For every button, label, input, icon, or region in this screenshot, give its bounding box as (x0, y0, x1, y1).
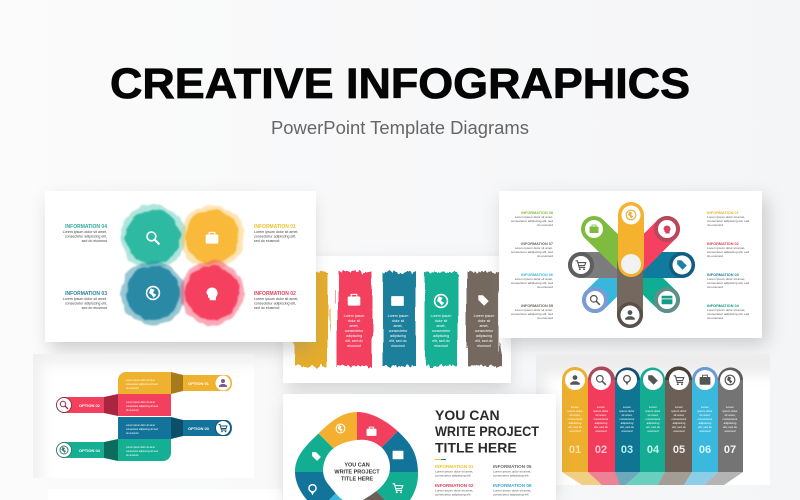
text: flower left labels: INFORMATION 08 (521, 211, 553, 215)
text: column captions: adipiscing (673, 421, 686, 425)
blob: red (180, 261, 244, 325)
text: information 05: Lorem ipsum dolor sit amet, (493, 470, 531, 474)
ring centre: YOU CAN (344, 462, 370, 468)
text: flower right labels: do eiusmod (707, 254, 723, 258)
column 06 (692, 367, 718, 472)
text: flower right labels: Lorem ipsum dolor sit amet, (707, 215, 745, 219)
petal: yellow (621, 206, 641, 274)
text: information 05: consectetur adipiscing elit (493, 474, 529, 478)
text: flower right labels: INFORMATION 04 (707, 304, 740, 308)
text: column captions: sit amet, (648, 413, 659, 417)
text: brush captions: adipiscing (346, 334, 362, 338)
option 04: consectetur adipiscing elit sed (126, 450, 159, 453)
text: information 01 (435, 464, 474, 478)
column 02 (588, 366, 615, 472)
petal: green (585, 220, 631, 265)
text: brush captions: eiusmod (391, 344, 405, 348)
text: column captions (568, 405, 738, 433)
text: brush captions: adipiscing (390, 334, 406, 338)
option 01: do eiusmod (126, 387, 139, 390)
text: information 01: INFORMATION 01 (254, 224, 296, 230)
column 01 (562, 367, 588, 472)
text: flower right labels (707, 211, 749, 320)
text: flower left labels: Lorem ipsum dolor sit amet, (515, 215, 553, 219)
text: flower left labels: do eiusmod (537, 316, 553, 320)
brush stroke: yellow (294, 272, 328, 366)
panel: bottom-left slide (48, 489, 282, 500)
icon: briefcase (348, 294, 360, 306)
blob: teal (121, 205, 185, 269)
blob: blue (121, 261, 185, 325)
text: brush captions: Lorem ipsum (344, 314, 364, 318)
petal: sky (582, 265, 631, 313)
icon: globe (147, 287, 159, 299)
text: information 04 (63, 224, 107, 243)
text: information 02: Lorem ipsum dolor sit amet, (254, 297, 298, 301)
option 04: OPTION 04 (79, 448, 101, 453)
text: flower right labels: INFORMATION 01 (707, 211, 739, 215)
option 04 (56, 439, 171, 461)
text: flower right labels: INFORMATION 03 (707, 273, 739, 277)
column 07 (718, 368, 743, 472)
text: flower left labels: Lorem ipsum dolor sit amet, (515, 246, 553, 250)
column 07: 07 (724, 444, 736, 456)
column 03: 03 (621, 444, 633, 456)
text: brush captions: amet, (436, 324, 446, 328)
text: flower right labels: consectetur adipiscing elit, sed (707, 312, 749, 316)
text: flower right labels: consectetur adipiscing elit, sed (707, 250, 749, 254)
option 03: do eiusmod (126, 432, 139, 435)
text: brush captions: adipiscing (476, 334, 492, 338)
text: column captions: Lorem (675, 405, 684, 409)
text: information 05: INFORMATION 05 (493, 464, 532, 469)
text: column captions: eiusmod (596, 429, 607, 433)
ring centre: WRITE PROJECT (334, 470, 380, 476)
heading: project title (435, 407, 539, 456)
text: column captions: adipiscing (569, 421, 582, 425)
text: flower right labels: Lorem ipsum dolor sit amet, (707, 308, 745, 312)
subtitle: PowerPoint Template Diagrams (271, 118, 529, 138)
text: brush captions: elit, sed do (345, 339, 363, 343)
text: column captions: sit amet, (622, 413, 633, 417)
text: column captions: elit, sed do (620, 425, 634, 429)
text: brush captions: consectetur (475, 329, 494, 333)
text: information 04: consectetur adipiscing elit, (65, 234, 107, 238)
icon: card (393, 451, 403, 459)
text: brush captions: dolor sit (478, 319, 490, 323)
text: information 01: sed do eiusmod (254, 239, 279, 243)
text: column captions: adipiscing (724, 421, 737, 425)
text: information 01: INFORMATION 01 (435, 464, 474, 469)
text: information 02: consectetur adipiscing elit, (254, 302, 296, 306)
column 01: 01 (569, 444, 581, 456)
column 06: 06 (699, 444, 711, 456)
panel: project title slide (283, 394, 556, 500)
text: information 06: Lorem ipsum dolor sit amet, (493, 488, 531, 492)
text: flower right labels: do eiusmod (707, 285, 723, 289)
text: information 03: sed do eiusmod (82, 306, 107, 310)
text: column captions: eiusmod (622, 429, 633, 433)
text: column captions: Lorem (623, 405, 632, 409)
text: flower right labels: do eiusmod (707, 223, 723, 227)
brush stroke: blue (383, 272, 415, 366)
text: flower left labels: INFORMATION 07 (521, 242, 553, 246)
text: brush captions: Lorem ipsum (388, 314, 408, 318)
text: column captions: sit amet, (700, 413, 711, 417)
text: flower left labels: do eiusmod (537, 254, 553, 258)
text: flower right labels: INFORMATION 02 (707, 242, 739, 246)
text: brush captions: dolor sit (392, 319, 404, 323)
text: flower right labels: consectetur adipiscing elit, sed (707, 281, 749, 285)
column 04: 04 (647, 444, 660, 456)
ring centre: TITLE HERE (341, 476, 373, 482)
text: information 03: Lorem ipsum dolor sit amet, (63, 297, 107, 301)
text: information 03: INFORMATION 03 (65, 291, 107, 297)
text: information 02: INFORMATION 02 (254, 291, 296, 297)
option 03: OPTION 03 (188, 426, 210, 431)
icon: briefcase (206, 232, 218, 244)
text: flower left labels: Lorem ipsum dolor sit amet, (515, 308, 553, 312)
text: column captions: Lorem (597, 405, 606, 409)
text: flower right labels: consectetur adipiscing elit, sed (707, 219, 749, 223)
text: information 01 (254, 224, 298, 243)
text: column captions: Lorem (701, 405, 710, 409)
text: brush captions: consectetur (389, 329, 408, 333)
column reflections (562, 472, 743, 485)
text: column captions: consectetur (620, 417, 635, 421)
icon: globe (336, 424, 345, 433)
text: flower left labels: consectetur adipiscing elit, sed (511, 312, 553, 316)
text: brush captions: dolor sit (435, 319, 447, 323)
text: information 02 (435, 483, 474, 496)
column 04 (640, 368, 665, 472)
text: information 04: sed do eiusmod (82, 239, 107, 243)
icon: card (391, 296, 404, 306)
text: brush captions: Lorem ipsum (431, 314, 451, 318)
text: brush captions: dolor sit (348, 319, 360, 323)
text: column captions: Lorem (571, 405, 580, 409)
option 04: Lorem ipsum dolor sit amet (126, 446, 155, 449)
option 02: OPTION 02 (79, 403, 101, 408)
text: brush captions: elit, sed do (475, 339, 493, 343)
text: column captions: elit, sed do (672, 425, 686, 429)
brush stroke: teal (425, 272, 458, 366)
text: column captions: consectetur (646, 417, 661, 421)
text: brush captions: adipiscing (433, 334, 449, 338)
petal: blue (631, 252, 695, 278)
text: brush captions: elit, sed do (432, 339, 450, 343)
text: column captions: elit, sed do (698, 425, 712, 429)
text: brush captions: amet, (350, 324, 358, 328)
text: column captions: consectetur (672, 417, 687, 421)
text: brush captions: eiusmod (434, 344, 448, 348)
text: flower left labels: consectetur adipiscing elit, sed (511, 250, 553, 254)
column 05 (665, 366, 692, 472)
text: column captions: eiusmod (570, 429, 581, 433)
petal: teal (631, 265, 680, 313)
text: column captions: Lorem (726, 405, 735, 409)
text: information 01: Lorem ipsum dolor sit amet, (435, 470, 473, 474)
text: column captions: Lorem (649, 405, 658, 409)
icon: tag (478, 295, 489, 306)
text: flower left labels (511, 211, 553, 320)
text: column captions: eiusmod (648, 429, 659, 433)
text: column captions: sit amet, (725, 413, 736, 417)
text: information 05 (493, 464, 532, 478)
icon: pin (309, 485, 316, 495)
option 01 (118, 372, 232, 394)
option 01: Lorem ipsum dolor sit amet (126, 379, 155, 382)
text: column captions: ipsum dolor (620, 409, 635, 413)
brush stroke: brown (467, 272, 500, 366)
text: column captions: eiusmod (674, 429, 685, 433)
ring chart (295, 412, 418, 500)
option 03 (118, 417, 232, 439)
text: information 06: consectetur adipiscing elit (493, 492, 529, 496)
text: column captions: sit amet, (596, 413, 607, 417)
text: column captions: ipsum dolor (594, 409, 609, 413)
icon: head (206, 287, 218, 300)
text: flower left labels: INFORMATION 06 (521, 273, 553, 277)
text: column captions: adipiscing (699, 421, 712, 425)
text: column captions: consectetur (568, 417, 583, 421)
text: column captions: elit, sed do (594, 425, 608, 429)
text: flower left labels: consectetur adipiscing elit, sed (511, 281, 553, 285)
text: column captions: elit, sed do (723, 425, 737, 429)
option 02: Lorem ipsum dolor sit amet (126, 401, 155, 404)
brush stroke: red (337, 272, 372, 366)
text: column captions: ipsum dolor (672, 409, 687, 413)
text: information 06 (493, 483, 532, 496)
text: column captions: sit amet, (674, 413, 685, 417)
text: flower left labels: do eiusmod (537, 285, 553, 289)
text: flower right labels: do eiusmod (707, 316, 723, 320)
title: CREATIVE INFOGRAPHICS (110, 60, 690, 108)
text: column captions: eiusmod (700, 429, 711, 433)
option 03: Lorem ipsum dolor sit amet (126, 424, 155, 427)
text: flower left labels: do eiusmod (537, 223, 553, 227)
option 03: consectetur adipiscing elit sed (126, 428, 159, 431)
text: information 04: Lorem ipsum dolor sit amet, (63, 230, 107, 234)
icon: cart (393, 484, 403, 493)
text: column captions: consectetur (698, 417, 713, 421)
panel: flower slide (499, 191, 767, 344)
option 01: OPTION 01 (188, 381, 210, 386)
ring centre (323, 440, 390, 500)
text: information 01: consectetur adipiscing elit (435, 474, 471, 478)
text: information 06: INFORMATION 06 (493, 483, 532, 488)
text: column captions: sit amet, (570, 413, 581, 417)
text: brush captions: consectetur (345, 329, 364, 333)
text: brush captions: eiusmod (477, 344, 491, 348)
text: flower left labels: Lorem ipsum dolor sit amet, (515, 277, 553, 281)
option 02: consectetur adipiscing elit sed (126, 405, 159, 408)
text: flower left labels: consectetur adipiscing elit, sed (511, 219, 553, 223)
option 02 (56, 394, 171, 416)
petal: gray (568, 252, 631, 278)
icon: search (147, 232, 159, 244)
text: brush captions: eiusmod (347, 344, 361, 348)
petal: red (631, 216, 680, 265)
text: column captions: elit, sed do (568, 425, 582, 429)
column 05: 05 (673, 444, 685, 456)
text: brush captions: Lorem ipsum (474, 314, 494, 318)
text: column captions: adipiscing (621, 421, 634, 425)
text: information 01: Lorem ipsum dolor sit amet, (254, 230, 298, 234)
option 01: consectetur adipiscing elit sed (126, 383, 159, 386)
text: column captions: ipsum dolor (568, 409, 583, 413)
text: flower right labels: Lorem ipsum dolor sit amet, (707, 277, 745, 281)
icon: globe (435, 295, 447, 307)
panel: numbered columns slide (536, 354, 770, 485)
text: brush captions: amet, (394, 324, 402, 328)
text: column captions: consectetur (594, 417, 609, 421)
text: information 02: sed do eiusmod (254, 306, 279, 310)
column 02: 02 (595, 444, 607, 456)
text: column captions: adipiscing (647, 421, 660, 425)
option 02: do eiusmod (126, 409, 139, 412)
text: information 02: consectetur adipiscing elit (435, 492, 471, 496)
text: column captions: ipsum dolor (723, 409, 738, 413)
panel: options slide (33, 354, 232, 478)
text: column captions: eiusmod (725, 429, 736, 433)
text: column captions: adipiscing (595, 421, 608, 425)
text: brush captions: elit, sed do (389, 339, 407, 343)
heading: project title: TITLE HERE (435, 440, 517, 456)
text: information 02 (254, 291, 298, 310)
petal: brown (617, 265, 643, 328)
column 03 (615, 368, 640, 472)
blob: yellow (180, 205, 244, 269)
heading: project title: WRITE PROJECT (435, 423, 539, 439)
text: brush captions: amet, (480, 324, 488, 328)
text: information 01: consectetur adipiscing elit, (254, 234, 296, 238)
text: information 02: INFORMATION 02 (435, 483, 474, 488)
text: column captions: ipsum dolor (646, 409, 661, 413)
heading: project title: YOU CAN (435, 407, 500, 423)
accent rule (435, 459, 446, 460)
text: column captions: elit, sed do (646, 425, 660, 429)
text: information 02: Lorem ipsum dolor sit amet, (435, 488, 473, 492)
option 04: do eiusmod (126, 454, 139, 457)
text: column captions: ipsum dolor (698, 409, 713, 413)
text: brush captions: consectetur (432, 329, 451, 333)
icon: tag (312, 452, 321, 461)
panel: brush strokes slide (283, 256, 511, 389)
text: flower left labels: INFORMATION 05 (521, 304, 553, 308)
panel: watercolor blobs slide (45, 191, 316, 350)
text: information 04: INFORMATION 04 (65, 224, 107, 230)
text: column captions: consectetur (723, 417, 738, 421)
text: information 03: consectetur adipiscing elit, (65, 302, 107, 306)
icon: briefcase (367, 427, 376, 436)
text: brush captions (344, 314, 494, 348)
text: information 03 (63, 291, 107, 310)
text: flower right labels: Lorem ipsum dolor sit amet, (707, 246, 745, 250)
